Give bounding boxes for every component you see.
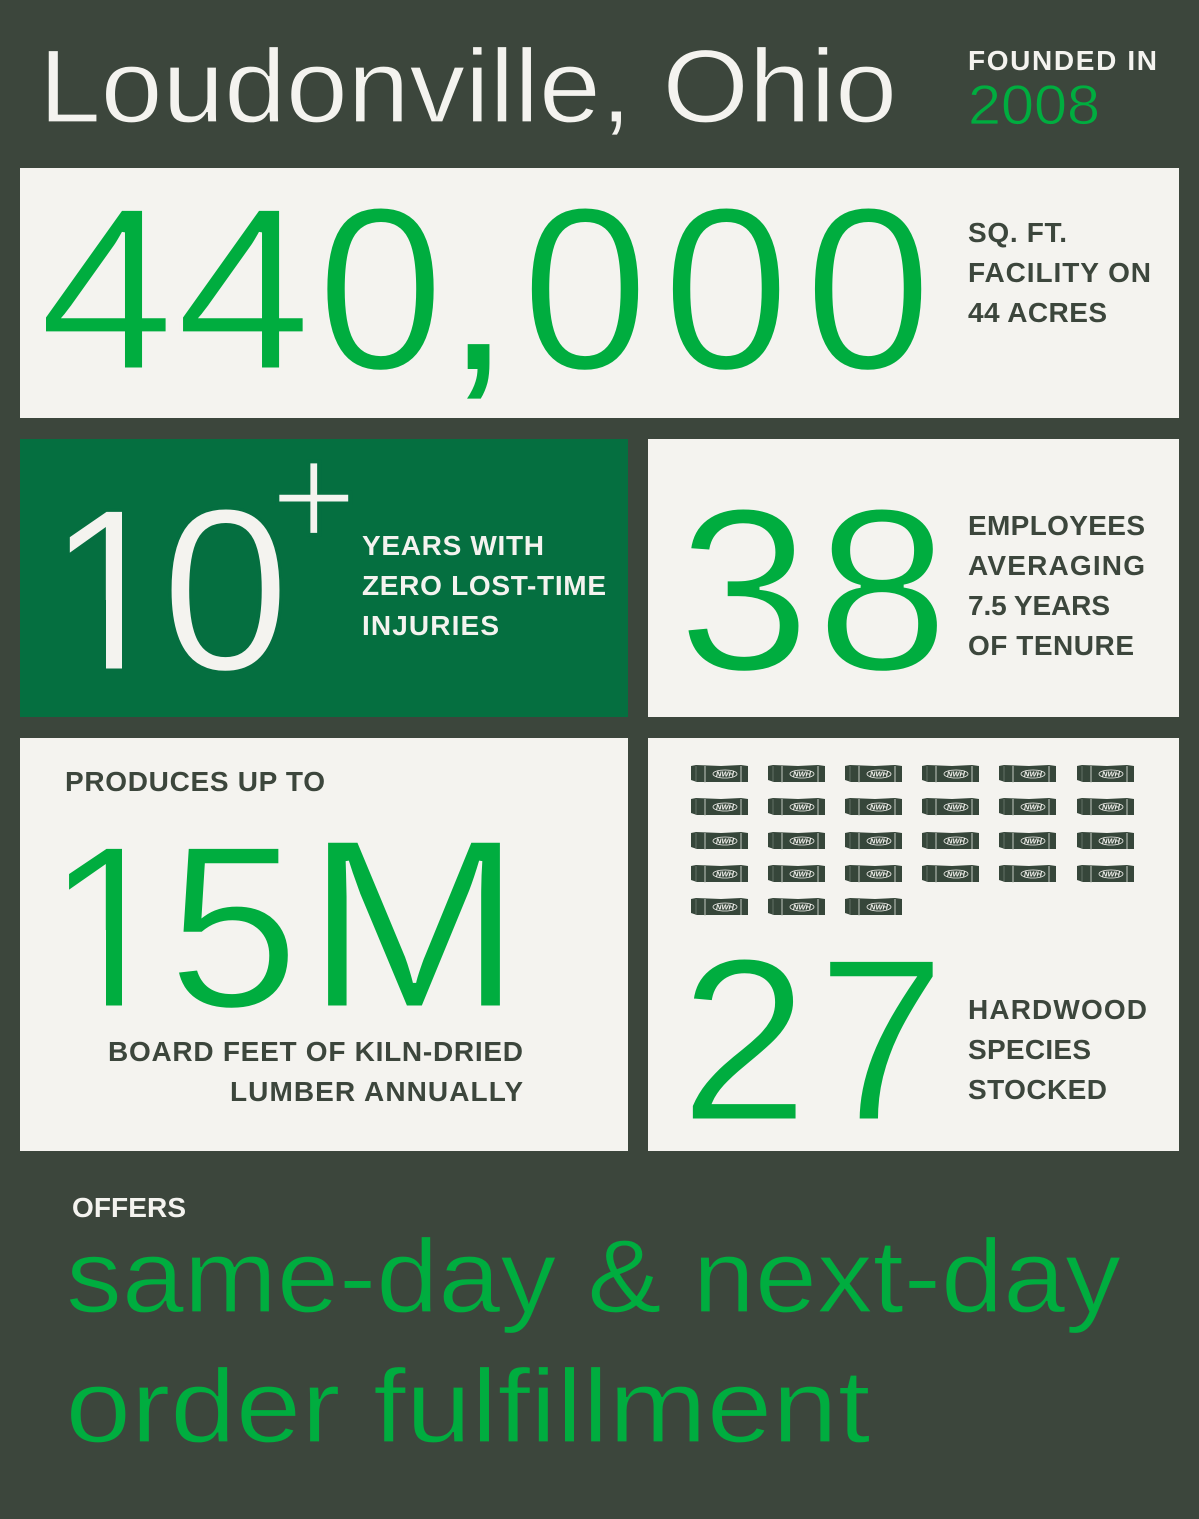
big number: 440,000: , xyxy=(447,159,510,418)
big number: 10+ xyxy=(40,412,358,720)
big number: 38: 8 xyxy=(816,460,949,719)
safety caption: ZERO LOST-TIME xyxy=(362,570,606,601)
panel: species xyxy=(648,738,1179,1170)
icon grid: 27 lumber bundles: NWH xyxy=(716,803,735,812)
safety caption: INJURIES xyxy=(362,610,499,641)
employees caption: 7.5 YEARS xyxy=(968,590,1110,621)
production caption xyxy=(108,1036,523,1107)
icon grid: 27 lumber bundles: NWH xyxy=(793,903,812,912)
big number: 440,000: 4 xyxy=(176,160,311,419)
icon grid: 27 lumber bundles: NWH xyxy=(1102,870,1121,879)
icon grid: 27 lumber bundles: NWH xyxy=(947,870,966,879)
icon grid: 27 lumber bundles: NWH xyxy=(870,903,889,912)
big number: 440,000: 0 xyxy=(663,159,790,418)
species caption: STOCKED xyxy=(968,1074,1107,1105)
icon grid: 27 lumber bundles: NWH xyxy=(1102,770,1121,779)
founded year: 2008 xyxy=(968,73,1100,136)
employees caption xyxy=(968,510,1145,661)
big number: 440,000: 0 xyxy=(805,159,932,418)
species caption: HARDWOOD xyxy=(968,994,1147,1025)
icon grid: 27 lumber bundles: NWH xyxy=(716,903,735,912)
big number: 10+: 0 xyxy=(161,461,290,720)
panel: production xyxy=(20,738,628,1151)
employees caption: OF TENURE xyxy=(968,630,1134,661)
title: Loudonville, Ohio xyxy=(39,29,897,145)
employees caption: AVERAGING xyxy=(968,550,1145,581)
icon grid: 27 lumber bundles: NWH xyxy=(1102,803,1121,812)
icon grid: 27 lumber bundles: NWH xyxy=(793,837,812,846)
icon grid: 27 lumber bundles: NWH xyxy=(793,803,812,812)
panel: employees xyxy=(648,439,1179,719)
employees caption: EMPLOYEES xyxy=(968,510,1145,541)
icon grid: 27 lumber bundles: NWH xyxy=(716,837,735,846)
fulfillment statement: order fulfillment xyxy=(66,1349,871,1465)
icon grid: 27 lumber bundles: NWH xyxy=(870,770,889,779)
fulfillment statement xyxy=(66,1219,1121,1465)
icon grid: 27 lumber bundles: NWH xyxy=(1024,870,1043,879)
facility caption: 44 ACRES xyxy=(968,297,1107,328)
offers lead-in: OFFERS xyxy=(72,1192,186,1223)
facility caption xyxy=(968,217,1151,328)
big number: 27: 7 xyxy=(817,911,946,1170)
panel: safety record xyxy=(20,412,628,720)
icon grid: 27 lumber bundles: NWH xyxy=(793,770,812,779)
panel: facility size xyxy=(20,159,1179,419)
icon grid: 27 lumber bundles: NWH xyxy=(870,837,889,846)
facility caption: SQ. FT. xyxy=(968,217,1067,248)
safety caption xyxy=(362,530,606,641)
icon grid: 27 lumber bundles: NWH xyxy=(1024,770,1043,779)
icon grid: 27 lumber bundles: NWH xyxy=(947,803,966,812)
icon grid: 27 lumber bundles: NWH xyxy=(793,870,812,879)
big number: 440,000: 0 xyxy=(521,159,649,418)
big number: 15M: M xyxy=(305,790,523,1059)
production lead-in: PRODUCES UP TO xyxy=(65,766,325,797)
big number: 440,000: 0 xyxy=(317,159,444,418)
big number: 15M: 1 xyxy=(45,797,176,1057)
icon grid: 27 lumber bundles: NWH xyxy=(947,837,966,846)
icon grid: 27 lumber bundles: NWH xyxy=(716,870,735,879)
big number: 38: 3 xyxy=(678,460,811,719)
icon grid: 27 lumber bundles: NWH xyxy=(1102,837,1121,846)
icon grid: 27 lumber bundles: NWH xyxy=(1024,837,1043,846)
icon grid: 27 lumber bundles: NWH xyxy=(870,870,889,879)
big number: 10+: 1 xyxy=(46,461,175,720)
icon grid: 27 lumber bundles: NWH xyxy=(716,770,735,779)
facility caption: FACILITY ON xyxy=(968,257,1151,288)
founded in label xyxy=(968,45,1157,136)
big number: 440,000 xyxy=(39,159,932,419)
big number: 15M xyxy=(40,790,523,1059)
icon grid: 27 lumber bundles: NWH xyxy=(947,770,966,779)
icon grid: 27 lumber bundles xyxy=(691,765,1134,916)
big number: 15M: 5 xyxy=(168,797,299,1057)
icon grid: 27 lumber bundles: NWH xyxy=(1024,803,1043,812)
big number: 440,000: 4 xyxy=(39,160,174,419)
icon grid: 27 lumber bundles: NWH xyxy=(870,803,889,812)
safety caption: YEARS WITH xyxy=(362,530,544,561)
big number: 10+: + xyxy=(270,412,358,580)
fulfillment statement: same-day & next-day xyxy=(66,1219,1121,1335)
founded in label: FOUNDED IN xyxy=(968,45,1157,76)
production caption: BOARD FEET OF KILN-DRIED xyxy=(108,1036,523,1067)
big number: 27: 2 xyxy=(680,911,809,1170)
species caption: SPECIES xyxy=(968,1034,1091,1065)
species caption xyxy=(968,994,1147,1105)
production caption: LUMBER ANNUALLY xyxy=(230,1076,523,1107)
